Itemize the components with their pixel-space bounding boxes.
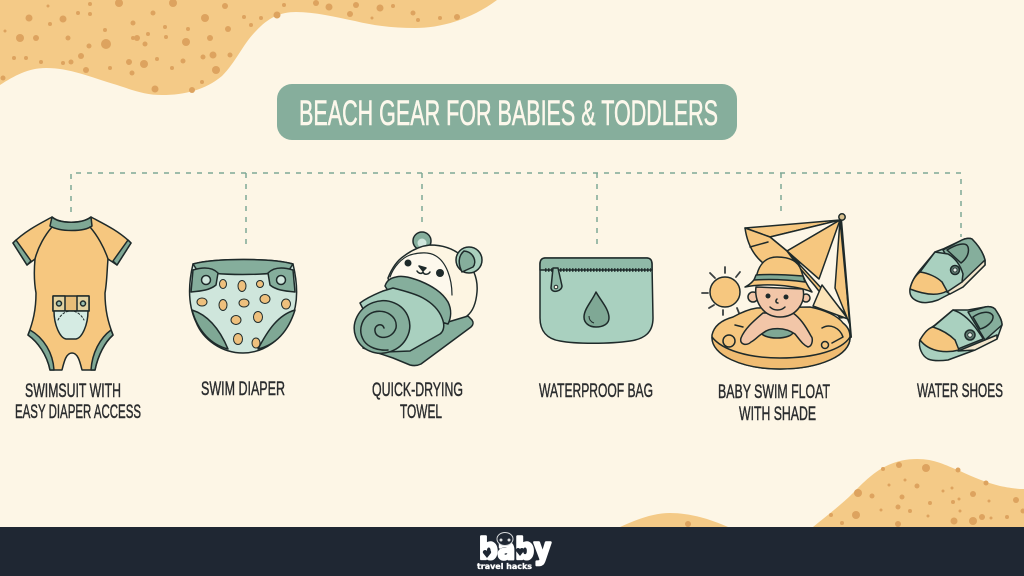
item: quick-drying towel icon <box>347 232 482 366</box>
sun hat <box>745 257 812 292</box>
label: quick-drying towel <box>372 380 463 423</box>
label: baby swim float <box>718 382 830 425</box>
label: swimsuit: EASY DIAPER ACCESS <box>15 402 141 423</box>
float ring <box>712 307 850 369</box>
sand: bottom right dunes <box>620 459 1024 527</box>
item: waterproof bag icon <box>540 258 653 343</box>
title pill: BEACH GEAR FOR BABIES & TODDLERS <box>299 94 718 133</box>
item: swim diaper icon <box>190 260 297 353</box>
label: swim diaper: SWIM DIAPER <box>201 379 285 400</box>
item: swimsuit icon <box>13 217 131 370</box>
item: baby swim float with shade icon <box>702 214 851 369</box>
logo icon: baby head <box>497 532 513 546</box>
shoe: top <box>910 238 985 303</box>
sun <box>702 267 740 315</box>
baby head <box>748 287 810 317</box>
shoe: bottom <box>919 307 1002 361</box>
label: waterproof bag: WATERPROOF BAG <box>539 381 653 402</box>
logo: baby travel hacks: baby <box>479 532 551 566</box>
label: swimsuit <box>15 381 141 423</box>
item: water shoes icon <box>910 238 1002 361</box>
title pill <box>277 84 737 140</box>
label: baby swim float: BABY SWIM FLOAT <box>718 382 830 403</box>
label: quick-drying towel: QUICK-DRYING <box>372 380 463 401</box>
label: quick-drying towel: TOWEL <box>400 402 442 423</box>
dashed connector lines <box>71 173 961 247</box>
label: baby swim float: WITH SHADE <box>739 404 816 425</box>
sand: top left dune <box>0 0 497 95</box>
label: swimsuit: SWIMSUIT WITH <box>25 381 121 402</box>
logo: heart counters <box>483 548 524 558</box>
baby body <box>741 313 812 347</box>
logo: baby travel hacks: travel hacks <box>477 562 532 571</box>
footer bar <box>0 527 1024 576</box>
umbrella canopy <box>745 214 851 337</box>
